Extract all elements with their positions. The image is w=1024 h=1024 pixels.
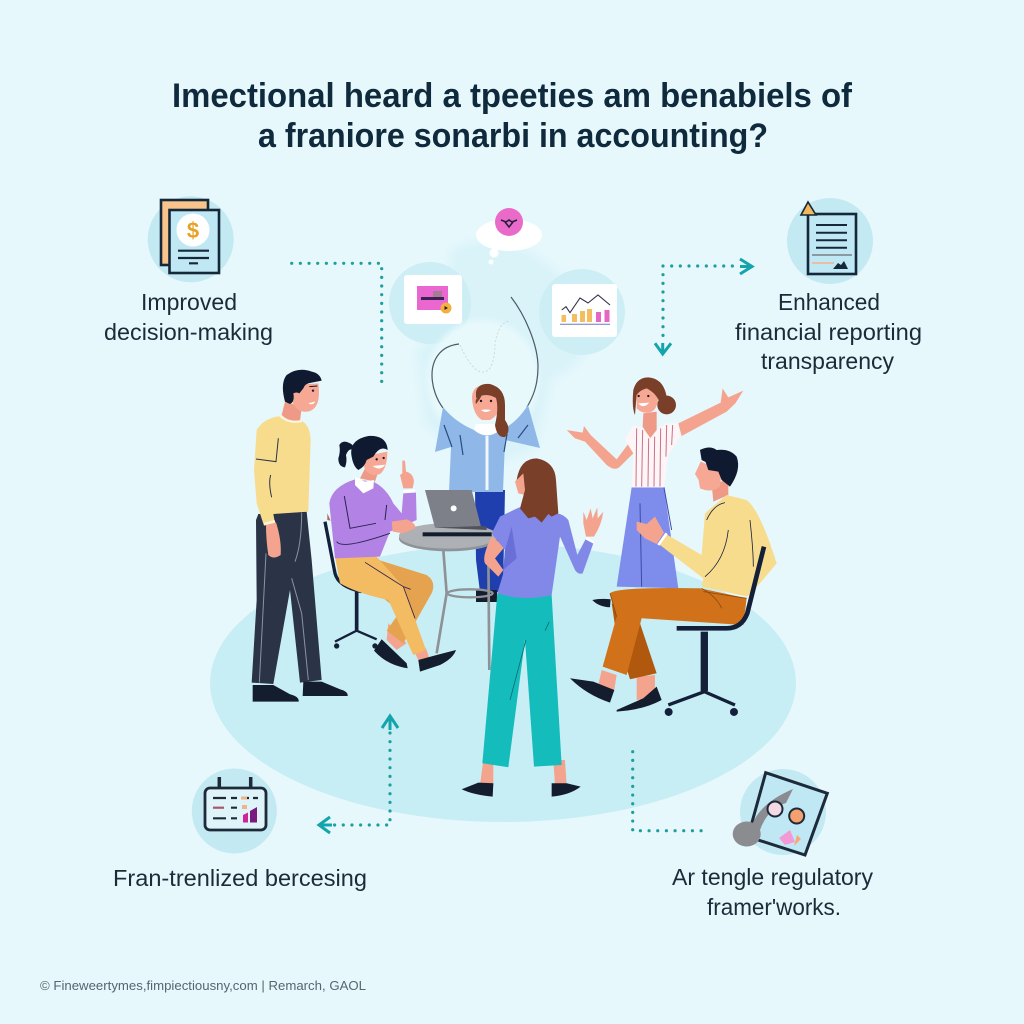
label: improved decision-making: Improved xyxy=(141,289,237,315)
person: seated woman in purple sweater xyxy=(325,436,456,672)
label: enhanced financial reporting transparency: financial reporting xyxy=(735,319,922,345)
chart card xyxy=(552,284,617,337)
label: enhanced financial reporting transparency xyxy=(735,289,922,374)
label: bottom left: Fran-trenlized bercesing xyxy=(113,865,367,891)
floor ellipse xyxy=(210,544,796,822)
dotted connector: bottom right xyxy=(633,752,707,831)
table with laptop xyxy=(399,490,498,670)
title: a franiore sonarbi in accounting? xyxy=(258,117,768,155)
person: seated man in yellow sweater on chair xyxy=(570,447,777,716)
person: central woman xyxy=(435,384,540,602)
person: woman in striped blouse with raised arms xyxy=(567,377,743,607)
icon: documents with dollar sign: $ xyxy=(187,218,199,243)
person: standing man in yellow sweater xyxy=(252,370,348,702)
label: bottom right: framer'works. xyxy=(707,894,841,920)
label: bottom right xyxy=(672,864,873,920)
label: bottom right: Ar tengle regulatory xyxy=(672,864,873,890)
icon: report document with warning triangle xyxy=(787,198,873,284)
label: enhanced financial reporting transparency: Enhanced xyxy=(778,289,880,315)
icon: calendar with bars xyxy=(192,768,277,854)
title xyxy=(172,77,853,155)
footer credit: © Fineweertymes,fimpiectiousny,com | Remarch, GAOL xyxy=(40,979,366,993)
icon: framework board with pin xyxy=(733,769,827,855)
label: improved decision-making xyxy=(104,289,273,345)
title: Imectional heard a tpeeties am benabiels of xyxy=(172,77,853,115)
label: enhanced financial reporting transparency: transparency xyxy=(761,348,894,374)
curved outline lines above the centre xyxy=(432,297,538,408)
thought bubble with pink icon xyxy=(476,208,542,264)
dotted connector: top left xyxy=(292,263,382,383)
icon: documents with dollar sign xyxy=(148,196,234,282)
person: woman seen from behind in teal trousers xyxy=(462,458,603,797)
label: improved decision-making: decision-making xyxy=(104,319,273,345)
dotted arrow: bottom left xyxy=(319,716,398,833)
background idea cloud xyxy=(389,240,625,470)
media card xyxy=(404,275,462,324)
dotted arrow: top right xyxy=(655,259,752,354)
